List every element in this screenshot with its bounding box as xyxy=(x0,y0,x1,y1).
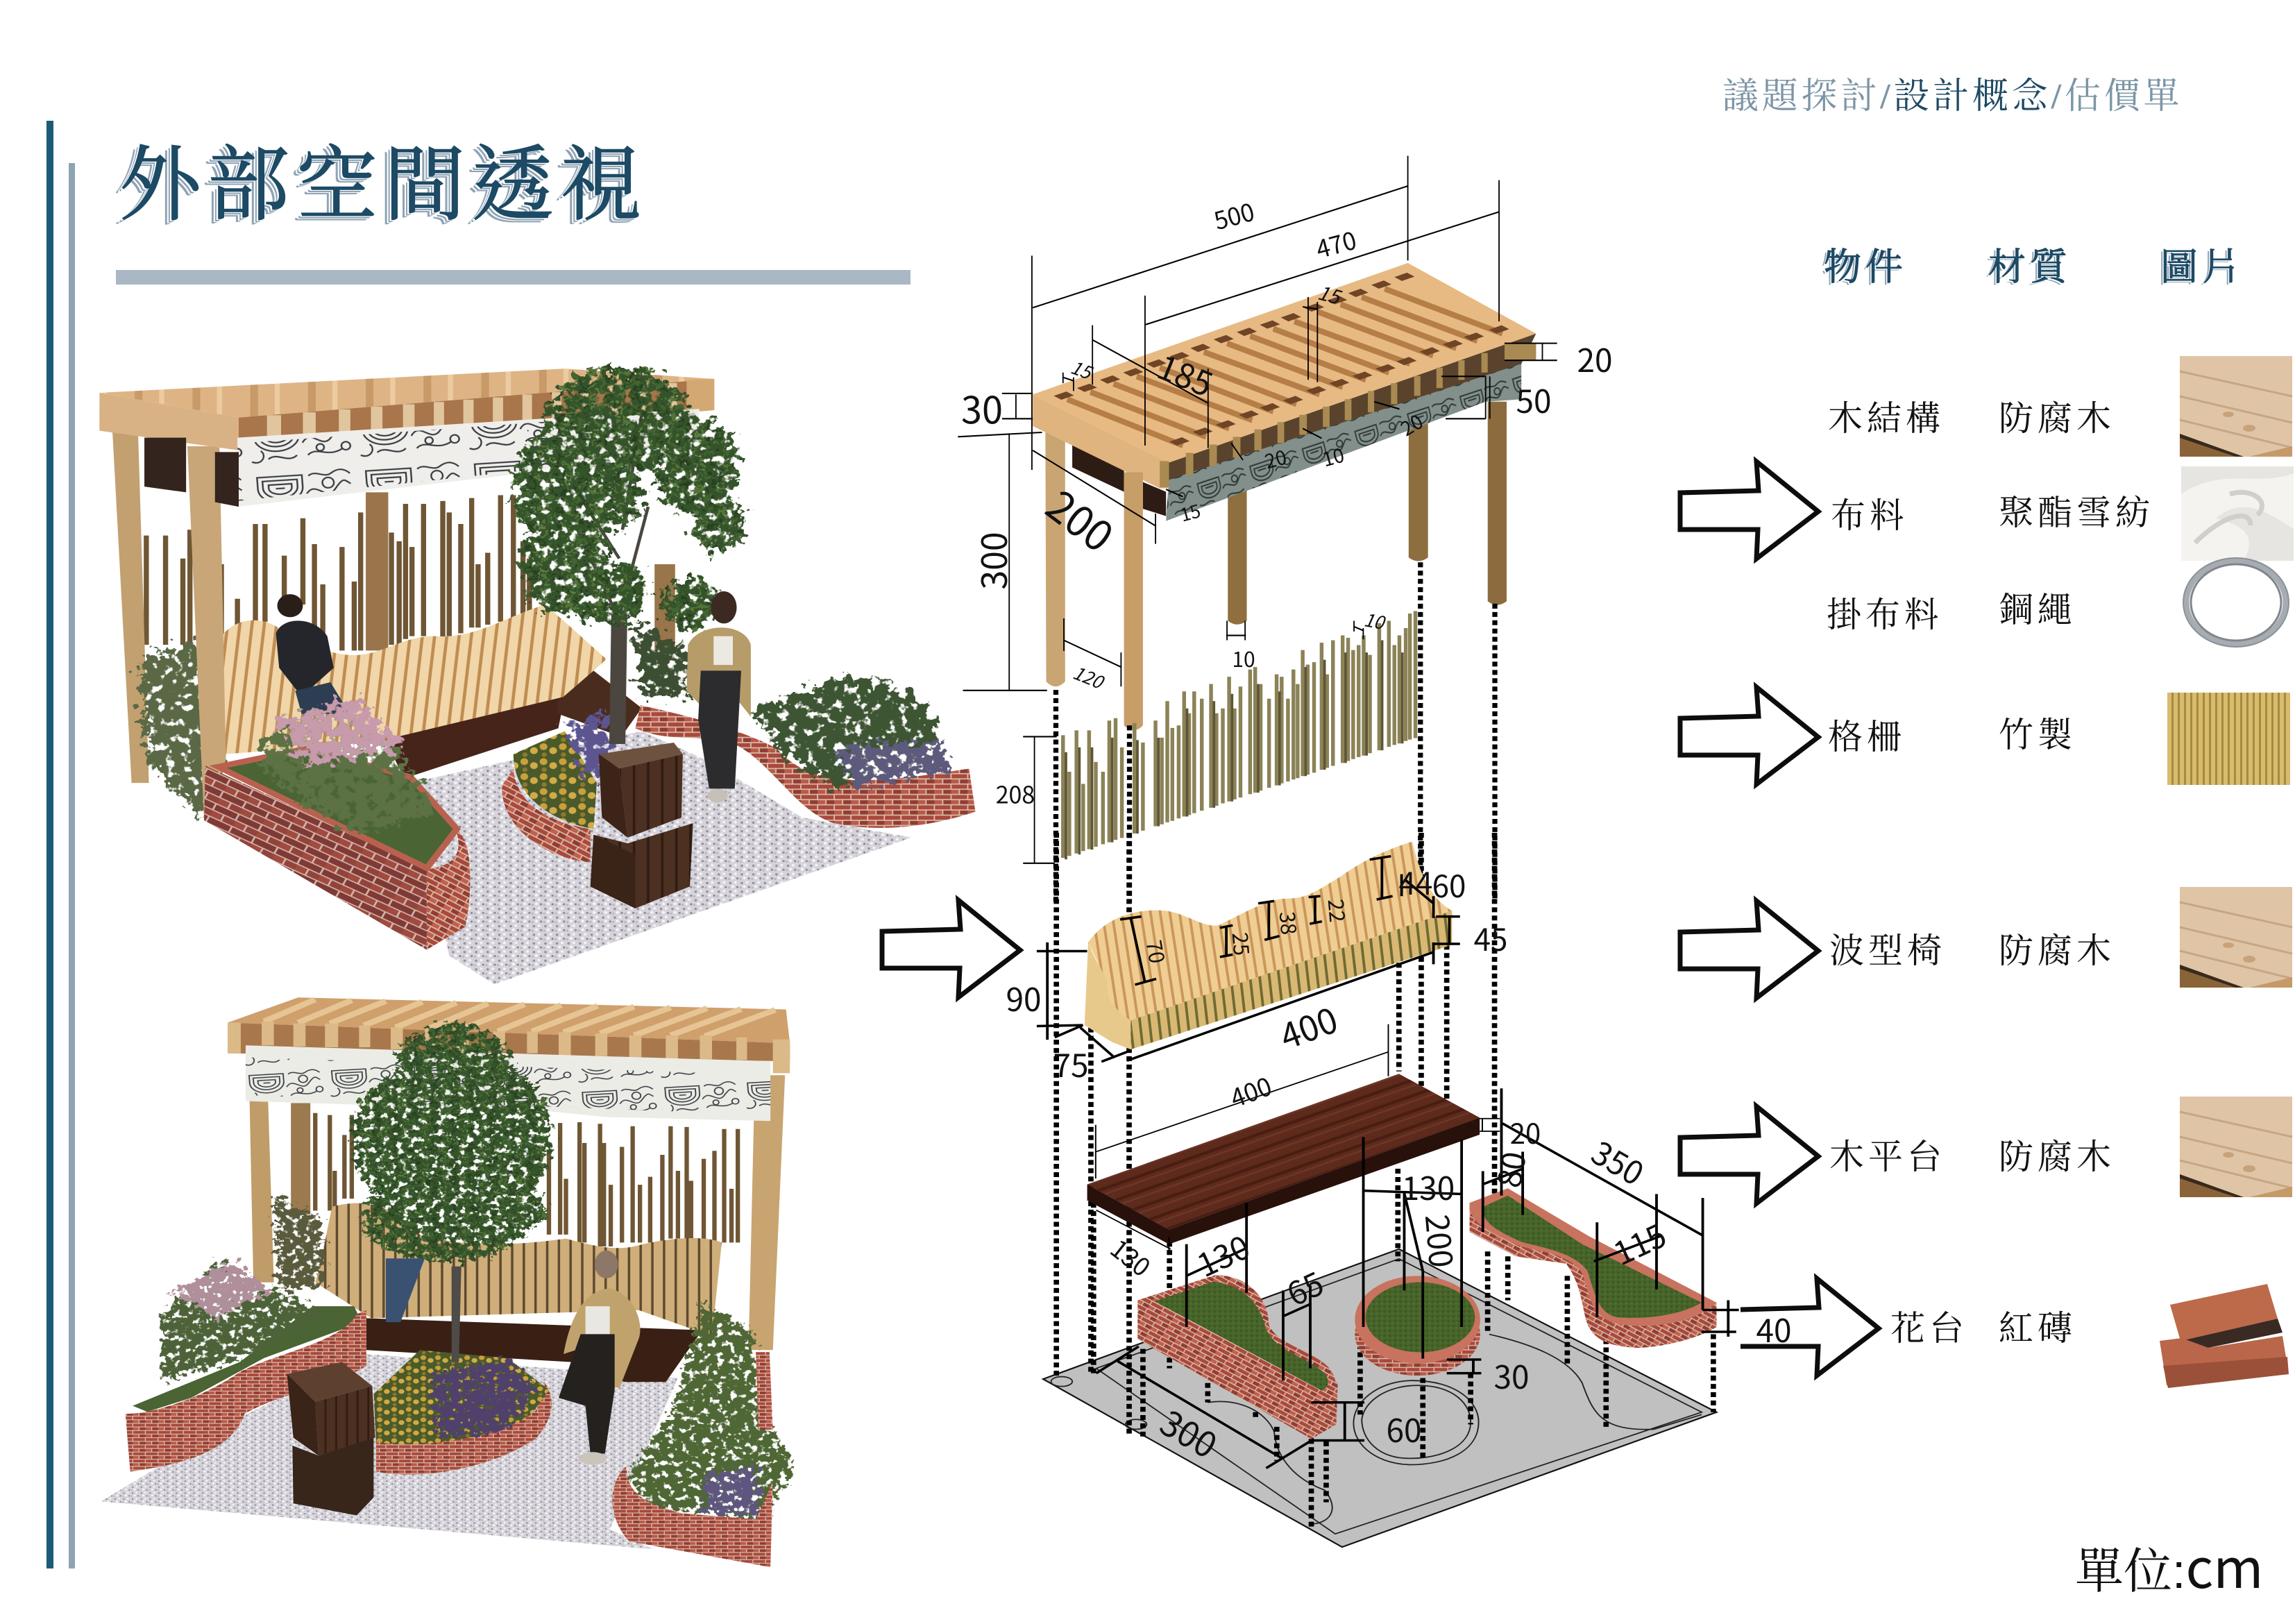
dimension labels: pergola: 15 xyxy=(1315,278,1346,311)
swatch: steel wire coil xyxy=(2183,558,2289,647)
perspective view: bottom xyxy=(101,997,795,1567)
dimension labels: bench and planters: 350 xyxy=(1584,1128,1653,1195)
dimension labels: bench and planters xyxy=(1006,859,1792,1469)
dimension labels: pergola: 10 xyxy=(1232,643,1255,673)
centre planter flowers xyxy=(373,1350,549,1444)
perspective view: top xyxy=(99,369,976,984)
dimension lines xyxy=(958,156,1557,863)
tree trunk and branches xyxy=(565,414,648,743)
planter B wall xyxy=(1355,1293,1480,1376)
dimension labels: pergola: 208 xyxy=(996,776,1035,811)
post 2 xyxy=(1124,473,1143,730)
planter A top xyxy=(1137,1275,1336,1407)
man seated xyxy=(276,594,350,714)
dimension labels: bench and planters: 130 xyxy=(1103,1230,1159,1284)
dimension labels: pergola: 500 xyxy=(1210,193,1258,237)
roof left fascia xyxy=(1033,394,1169,489)
tree foliage xyxy=(514,369,745,630)
post 3 xyxy=(1228,489,1247,625)
gravel ground xyxy=(411,731,911,984)
dimension labels: bench and planters: 45 xyxy=(1474,915,1507,960)
pergola slat ends xyxy=(267,383,677,447)
dotted alignment lines xyxy=(1056,562,1495,902)
thin dimension lines xyxy=(1096,1024,1500,1251)
dimension labels: bench and planters: 60 xyxy=(1432,862,1466,906)
pergola roof corner block xyxy=(99,393,239,450)
left wave planter wall xyxy=(126,1310,366,1471)
row: fabric: 布料 xyxy=(1831,496,1908,535)
dimension labels: pergola xyxy=(961,193,1613,810)
arrow: screen xyxy=(1680,687,1818,784)
title: 外部空間透視 xyxy=(119,140,648,231)
dimension labels: bench and planters: 38 xyxy=(1273,910,1305,936)
planter C top xyxy=(1469,1188,1716,1326)
planter B top xyxy=(1355,1276,1480,1364)
pergola roof diagonal slats xyxy=(264,999,775,1036)
dimension labels: bench and planters: 300 xyxy=(1152,1396,1227,1469)
dimension labels: pergola: 120 xyxy=(1069,659,1109,695)
dimension labels: pergola: 10 xyxy=(1362,606,1389,635)
row: bench material: 防腐木 xyxy=(1999,931,2115,970)
planter C lawn xyxy=(1481,1196,1702,1318)
swatch: wood 3 xyxy=(2180,1097,2292,1197)
wave bench xyxy=(221,604,607,754)
bamboo screen xyxy=(146,496,530,650)
fabric xyxy=(246,1045,770,1121)
right wave planter wall xyxy=(635,705,976,828)
woman standing xyxy=(559,1251,641,1465)
planter B lawn xyxy=(1366,1282,1475,1353)
centre planter wall xyxy=(502,768,591,862)
centre planter flowers xyxy=(514,731,597,829)
right planter plants xyxy=(751,679,950,788)
roof holes front row xyxy=(1169,325,1509,446)
roof underside shadow strip xyxy=(1169,334,1536,480)
centre planter wall xyxy=(376,1382,552,1475)
row: fabric material: 聚酯雪紡 xyxy=(1999,493,2154,532)
pergola roof top xyxy=(228,997,790,1043)
dimension labels: bench and planters: 130 xyxy=(1189,1223,1257,1287)
arrow: planter xyxy=(1741,1278,1879,1376)
right planter blooms xyxy=(834,740,950,786)
wave bench end xyxy=(1085,942,1130,1049)
seated figure legs xyxy=(386,1258,425,1322)
fabric pattern xyxy=(237,421,565,501)
material rows text xyxy=(1827,399,2154,1348)
pergola roof top xyxy=(99,369,714,418)
bamboo screen xyxy=(315,1113,738,1246)
table header: image: 圖片 xyxy=(2160,246,2244,288)
row: planter: 花台 xyxy=(1890,1309,1968,1348)
woman standing xyxy=(686,591,751,802)
dimension labels: pergola: 15 xyxy=(1177,497,1203,527)
dimension labels: pergola: 10 xyxy=(1319,441,1347,473)
dimension labels: pergola: 470 xyxy=(1312,221,1360,266)
planter A wall xyxy=(1137,1300,1338,1439)
bench timber base xyxy=(385,697,565,778)
dimension labels: bench and planters: 30 xyxy=(1493,1353,1530,1398)
dimension labels: pergola: 20 xyxy=(1262,443,1289,475)
dimension labels: pergola: 50 xyxy=(1516,377,1552,423)
roof slat ends xyxy=(1160,344,1536,487)
floor post footprints xyxy=(1051,1377,1146,1429)
row: timber structure: 木結構 xyxy=(1828,399,1945,438)
pink blooms xyxy=(169,1262,274,1318)
swatch: chiffon xyxy=(2181,466,2294,561)
dimension labels: pergola: 185 xyxy=(1151,341,1221,406)
row: deck material: 防腐木 xyxy=(1999,1137,2115,1176)
planter A lawn xyxy=(1155,1282,1328,1391)
wave bench back xyxy=(1088,842,1452,1020)
lower crate xyxy=(292,1438,373,1516)
dimension labels: bench and planters: 70 xyxy=(1140,938,1174,965)
dimension labels: pergola: 300 xyxy=(967,532,1017,590)
dimension labels: bench and planters: 65 xyxy=(1279,1259,1330,1316)
pergola exploded component xyxy=(958,156,1557,902)
timber deck top xyxy=(1087,1074,1480,1230)
unit note: 單位:cm xyxy=(2075,1526,2263,1604)
pink flowering plant xyxy=(162,1258,332,1382)
left post xyxy=(250,1099,274,1283)
floor plate xyxy=(1043,1249,1716,1547)
swatch: wood 2 xyxy=(2180,887,2292,988)
left accent bar dark xyxy=(46,121,53,1568)
row: timber material: 防腐木 xyxy=(1999,399,2115,438)
pink blooms xyxy=(273,697,405,766)
row: screen material: 竹製 xyxy=(1999,716,2076,754)
row: hanging fabric: 掛布料 xyxy=(1827,595,1943,634)
row: wave bench: 波型椅 xyxy=(1829,931,1946,970)
rear posts xyxy=(291,1103,310,1215)
arrow: toward exploded view xyxy=(882,900,1020,997)
swatch: wood 1 xyxy=(2180,356,2292,457)
wave bench xyxy=(315,1203,722,1336)
roof holes rear row xyxy=(1053,273,1414,400)
dimension labels: pergola: 20 xyxy=(1577,336,1613,382)
timber deck side xyxy=(1087,1117,1480,1244)
dimension labels: pergola: 30 xyxy=(961,380,1003,434)
left planter wall xyxy=(204,766,427,950)
dimension lines xyxy=(1037,856,1739,1468)
fabric band xyxy=(1166,362,1521,521)
purple flowers xyxy=(565,708,609,783)
post 5 xyxy=(1488,402,1507,605)
lower crate xyxy=(591,823,693,908)
dimension labels: pergola: 20 xyxy=(1396,407,1428,442)
row: planter material: 紅磚 xyxy=(1999,1309,2076,1348)
left post xyxy=(112,429,149,783)
front post xyxy=(187,446,226,820)
dimension labels: bench and planters: 200 xyxy=(1416,1212,1466,1269)
planter C wall xyxy=(1470,1203,1716,1348)
bench timber base xyxy=(366,1318,702,1382)
left planter soil xyxy=(218,748,457,868)
dimension labels: bench and planters: 115 xyxy=(1605,1211,1673,1275)
bamboo fence xyxy=(1063,611,1416,858)
rear posts xyxy=(366,492,675,650)
grass at left xyxy=(274,1194,323,1290)
post 1 xyxy=(1045,426,1065,686)
right planter plants xyxy=(629,1302,795,1521)
table header: material: 材質 xyxy=(1988,246,2072,288)
dimension labels: bench and planters: 80 xyxy=(1484,1148,1536,1191)
dimension labels: bench and planters: 20 xyxy=(1510,1112,1541,1152)
hanging dark fabric xyxy=(144,438,239,507)
post 4 xyxy=(1409,423,1428,561)
pink flowering plant xyxy=(257,708,437,835)
fabric xyxy=(237,409,700,507)
left wave planter soil xyxy=(133,1306,362,1412)
purple and pink bloom mass xyxy=(430,1358,536,1438)
grass clump xyxy=(138,639,221,818)
dimension labels: bench and planters: 130 xyxy=(1402,1164,1455,1210)
upper crate xyxy=(599,743,683,838)
right planter purple blooms xyxy=(702,1466,761,1517)
pergola end block xyxy=(686,379,714,412)
top breadcrumb navigation: 議題探討/設計概念/估價單 xyxy=(1722,77,2183,117)
table header: object: 物件 xyxy=(1824,246,1907,288)
dimension labels: bench and planters: 44 xyxy=(1399,859,1432,904)
swatch: bamboo xyxy=(2167,693,2290,785)
bamboo fence shadow stems xyxy=(1066,641,1403,859)
roof slat lines xyxy=(1067,289,1502,446)
dimension labels: pergola: 15 xyxy=(1067,354,1096,385)
swatch: bricks xyxy=(2160,1284,2289,1388)
row: hanging material: 鋼繩 xyxy=(1999,591,2076,629)
pergola roof recess strip xyxy=(239,379,714,450)
dimension labels: bench and planters: 400 xyxy=(1273,993,1344,1060)
tree trunk xyxy=(452,1267,461,1362)
dimension labels: bench and planters: 60 xyxy=(1386,1406,1422,1452)
hanging dark fabric xyxy=(1072,445,1166,516)
pergola front beam xyxy=(228,1022,790,1073)
left accent bar light xyxy=(69,163,75,1568)
dimension labels: bench and planters: 22 xyxy=(1322,897,1354,924)
right planter wall xyxy=(612,1466,773,1567)
dimension labels: pergola: 200 xyxy=(1035,474,1127,564)
dimension labels: bench and planters: 90 xyxy=(1006,975,1042,1021)
dimension labels: bench and planters: 40 xyxy=(1756,1306,1792,1352)
tree foliage xyxy=(352,1024,551,1262)
arrow: deck xyxy=(1680,1106,1818,1203)
dimension labels: bench and planters: 75 xyxy=(1053,1041,1089,1087)
floor plan outlines xyxy=(1096,1259,1702,1534)
right post xyxy=(749,1075,785,1350)
title underline rule xyxy=(116,270,911,285)
arrow: fabric xyxy=(1680,462,1818,559)
row: deck: 木平台 xyxy=(1829,1137,1946,1176)
dimension labels: bench and planters: 400 xyxy=(1225,1067,1276,1115)
dimension labels: bench and planters: 25 xyxy=(1226,931,1258,957)
right planter back wall xyxy=(756,1352,773,1430)
gravel ground xyxy=(101,1354,678,1549)
fabric pattern xyxy=(246,1057,770,1115)
raised planters, deck, bench and floor component xyxy=(1037,833,1739,1547)
wave bench seat front xyxy=(1130,911,1452,1049)
left planter end xyxy=(427,829,471,950)
arrow: bench xyxy=(1680,901,1818,998)
roof top xyxy=(1033,263,1536,462)
rear crate xyxy=(557,670,642,737)
dotted alignment lines xyxy=(1056,833,1713,1529)
upper crate xyxy=(287,1362,375,1455)
roof beam backing xyxy=(228,1022,790,1061)
grasses behind woman xyxy=(632,622,690,697)
row: screen: 格柵 xyxy=(1828,718,1906,756)
